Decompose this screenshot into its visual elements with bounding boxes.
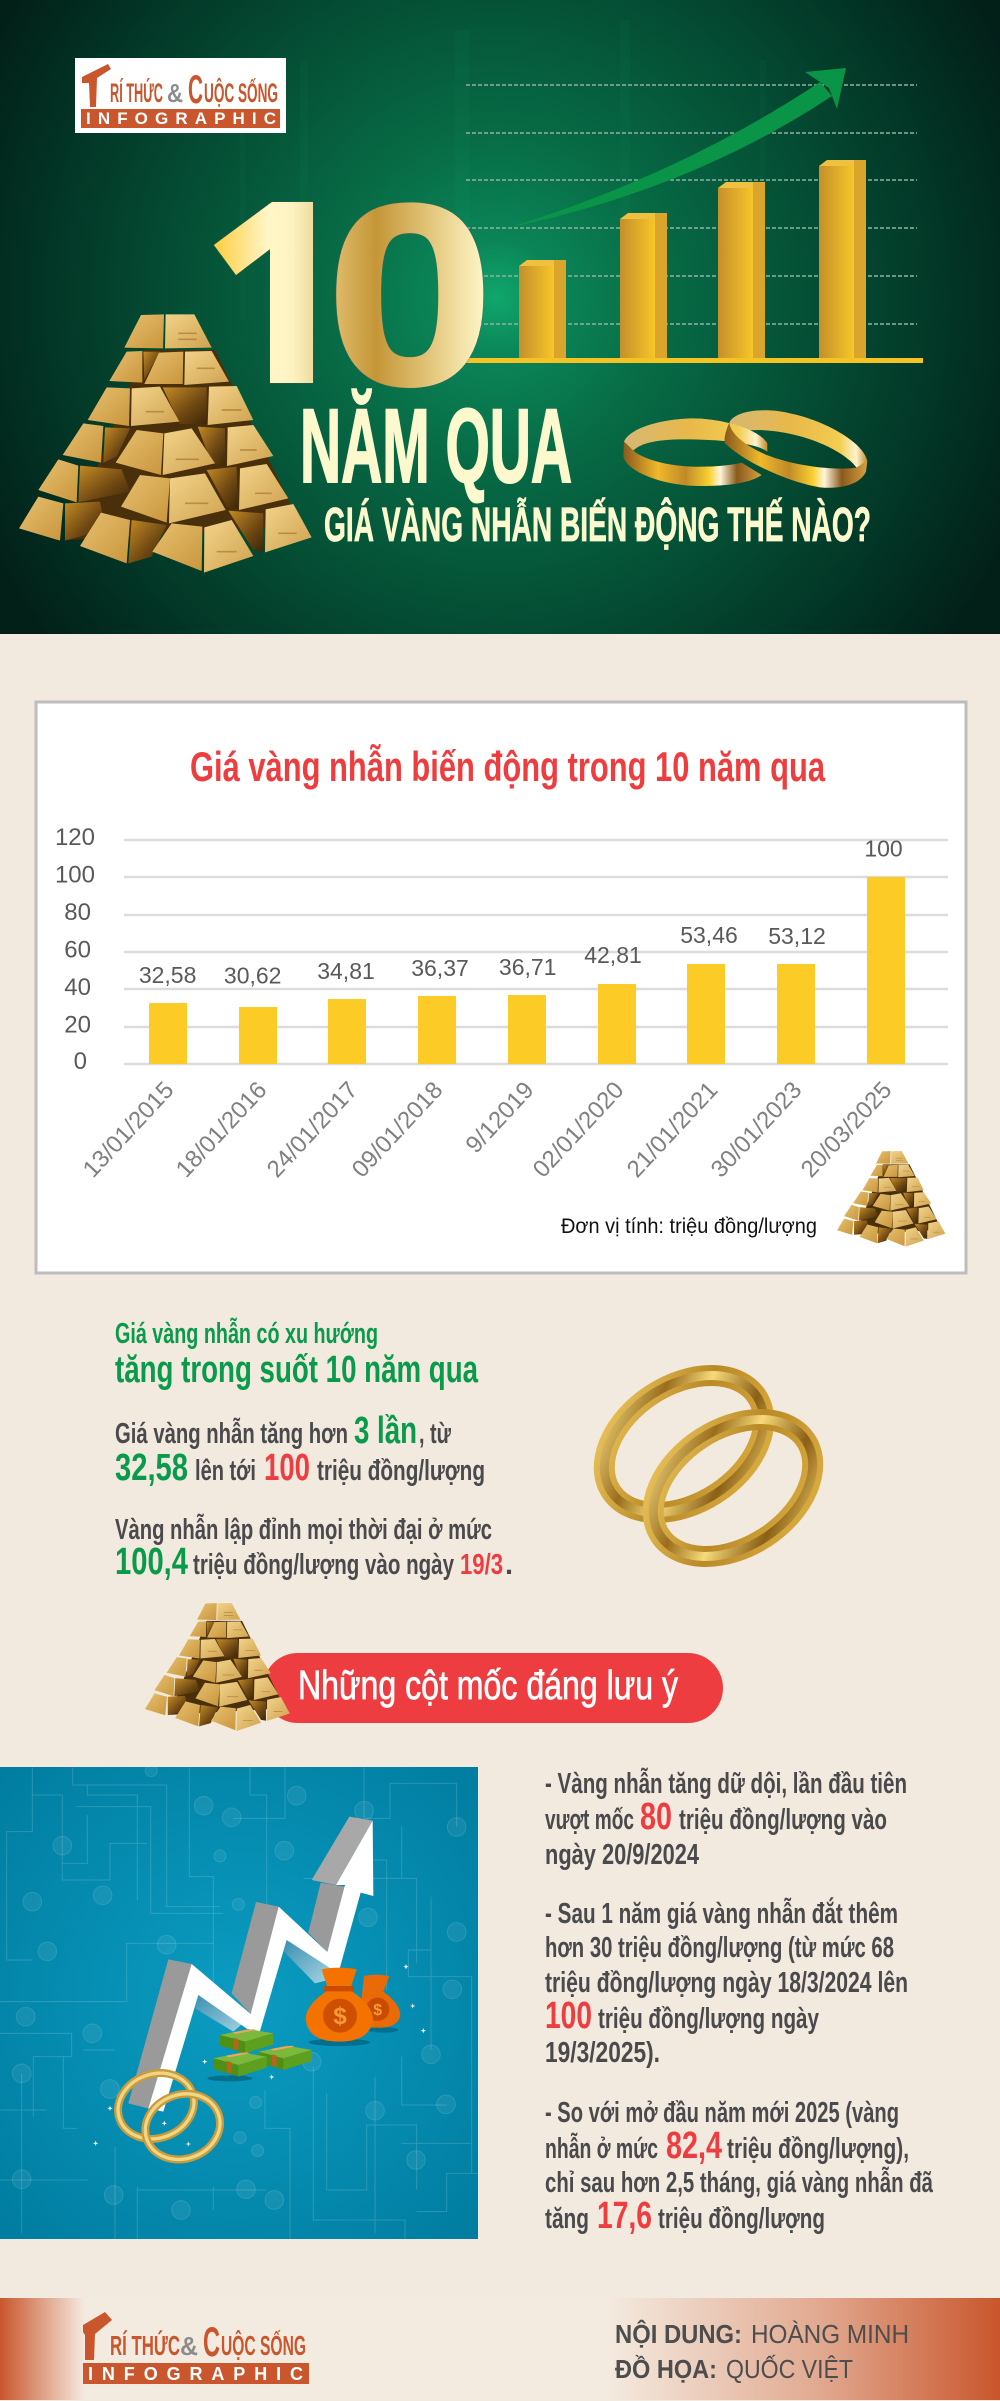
bar chart: 9/12019 [460, 1077, 539, 1159]
bar chart: 34,81 [317, 958, 375, 984]
text block: milestones list: tăng [545, 2203, 589, 2235]
icon: gold bar pyramid [19, 314, 312, 573]
bar chart: 30,62 [224, 962, 281, 988]
text block: trend summary: triệu đồng/lượng [317, 1455, 485, 1487]
text block: trend summary: Giá vàng nhẫn tăng hơn [115, 1416, 348, 1450]
footer logo: INFOGRAPHIC [88, 2364, 303, 2384]
bar chart: 100 [864, 836, 903, 862]
bar chart: 80 [64, 899, 91, 926]
icon: two gold wedding bands [623, 410, 867, 488]
icon: orange money bags: $ [333, 2003, 347, 2030]
credits: ĐỒ HỌA: [615, 2354, 717, 2384]
panel: footer band [0, 2298, 1000, 2400]
text block: trend summary: Vàng nhẫn lập đỉnh mọi thời đại ở mức [115, 1512, 492, 1546]
icon: sparkles [93, 1964, 426, 2147]
footer logo: UỘC SỐNG [221, 2329, 306, 2361]
bar chart: 40 [64, 974, 91, 1001]
text block: milestones list: nhẫn ở mức [545, 2131, 658, 2165]
section heading: pill banner: Những cột mốc đáng lưu ý [298, 1662, 678, 1708]
bar chart: 20/03/2025 [796, 1077, 897, 1183]
text block: milestones list: triệu đồng/lượng), [727, 2133, 909, 2165]
text block: milestones list: 80 [640, 1796, 672, 1838]
text block: trend summary: 100 [264, 1447, 310, 1489]
footer logo: C [203, 2318, 220, 2365]
footer logo: & [180, 2331, 198, 2361]
panel: chart card [36, 702, 966, 1273]
heading: big number 10: 0 [326, 150, 494, 439]
text block: milestones list: triệu đồng/lượng vào [679, 1804, 887, 1836]
logo: Tri thức & Cuộc sống Infographic [75, 58, 286, 133]
icon: stacks of green banknotes [207, 2029, 312, 2081]
text block: trend summary: Giá vàng nhẫn có xu hướng [115, 1316, 378, 1350]
icon: interlocked gold rings [579, 1347, 838, 1585]
bar chart: 60 [64, 936, 91, 964]
logo: Tri thức & Cuộc sống Infographic: C [188, 68, 203, 112]
bar chart: 30/01/2023 [706, 1077, 807, 1183]
bar chart: 36,37 [411, 955, 469, 981]
bar chart: 53,46 [680, 922, 738, 948]
text block: milestones list: ngày 20/9/2024 [545, 1839, 699, 1871]
text block: trend summary: lên tới [195, 1455, 256, 1487]
bar chart: 20 [64, 1012, 91, 1038]
credits [615, 2319, 909, 2384]
icon: orange money bags [306, 1968, 400, 2046]
logo: Tri thức & Cuộc sống Infographic: RÍ THỨC [110, 77, 163, 108]
credits: NỘI DUNG: [615, 2319, 742, 2349]
arrow: white zigzag rising arrow [128, 1817, 373, 2112]
credits: HOÀNG MINH [751, 2319, 909, 2349]
bar chart: 21/01/2021 [622, 1077, 723, 1183]
text block: trend summary: 19/3 [460, 1549, 503, 1581]
icon: gold pyramid beside banner [145, 1603, 290, 1731]
bar chart: 53,12 [768, 923, 826, 949]
bar chart: 42,81 [584, 942, 642, 968]
text block: trend summary: triệu đồng/lượng vào ngày [193, 1549, 454, 1581]
chart decoration: rising gold bars [464, 85, 923, 363]
heading: big number 10 [214, 201, 484, 389]
text block: milestones list: vượt mốc [545, 1804, 634, 1836]
bar chart: 120 [55, 824, 95, 851]
bar chart: 24/01/2017 [262, 1077, 363, 1183]
text block: trend summary: 100,4 [115, 1541, 188, 1583]
section heading: pill banner [263, 1653, 723, 1723]
text block: milestones list: triệu đồng/lượng ngày [598, 2003, 819, 2035]
heading: NĂM QUA: NĂM QUA [300, 388, 572, 505]
text block: milestones list: 82,4 [666, 2125, 722, 2167]
text block: milestones list [545, 1766, 934, 2237]
icon: gold rings at arrow base [114, 2069, 224, 2164]
panel: hero header [0, 0, 1000, 634]
bar chart: 09/01/2018 [347, 1077, 448, 1183]
text block: milestones list: 19/3/2025). [545, 2037, 660, 2069]
text block: milestones list: 17,6 [597, 2195, 652, 2237]
unit note: Đơn vị tính: triệu đồng/lượng [561, 1215, 817, 1238]
icon: orange money bags: $ [373, 2002, 382, 2019]
text block: trend summary: , từ [419, 1418, 451, 1450]
logo: Tri thức & Cuộc sống Infographic: & [167, 78, 183, 108]
bar chart: 18/01/2016 [171, 1077, 272, 1183]
bar chart: 36,71 [499, 954, 556, 980]
arrow: rising green trend [507, 68, 846, 228]
bar chart: 13/01/2015 [78, 1077, 179, 1183]
bar chart: 100 [55, 862, 95, 888]
text block: trend summary: 3 lần [354, 1410, 417, 1452]
text block: trend summary: tăng trong suốt 10 năm qua [115, 1349, 479, 1391]
credits: QUỐC VIỆT [726, 2354, 853, 2384]
text block: milestones list: triệu đồng/lượng [658, 2203, 825, 2235]
footer logo: RÍ THỨC [110, 2330, 180, 2361]
text block: trend summary [115, 1316, 513, 1583]
bar chart: 02/01/2020 [528, 1077, 629, 1183]
logo: Tri thức & Cuộc sống Infographic: UỘC SỐNG [204, 76, 278, 108]
text block: milestones list: 100 [545, 1995, 592, 2037]
logo: Tri thức & Cuộc sống Infographic: INFOGRAPHIC [86, 109, 276, 128]
text block: trend summary: . [505, 1549, 513, 1581]
bar chart: 32,58 [139, 962, 196, 988]
bar chart: 0 [74, 1048, 87, 1075]
heading: big number 10: 1 [190, 147, 336, 440]
bar chart [55, 824, 948, 1183]
panel: illustration of rising gold price [0, 1765, 478, 2240]
icon: small gold pyramid [837, 1151, 945, 1247]
text block: trend summary: 32,58 [115, 1447, 188, 1489]
footer logo [83, 2312, 309, 2384]
